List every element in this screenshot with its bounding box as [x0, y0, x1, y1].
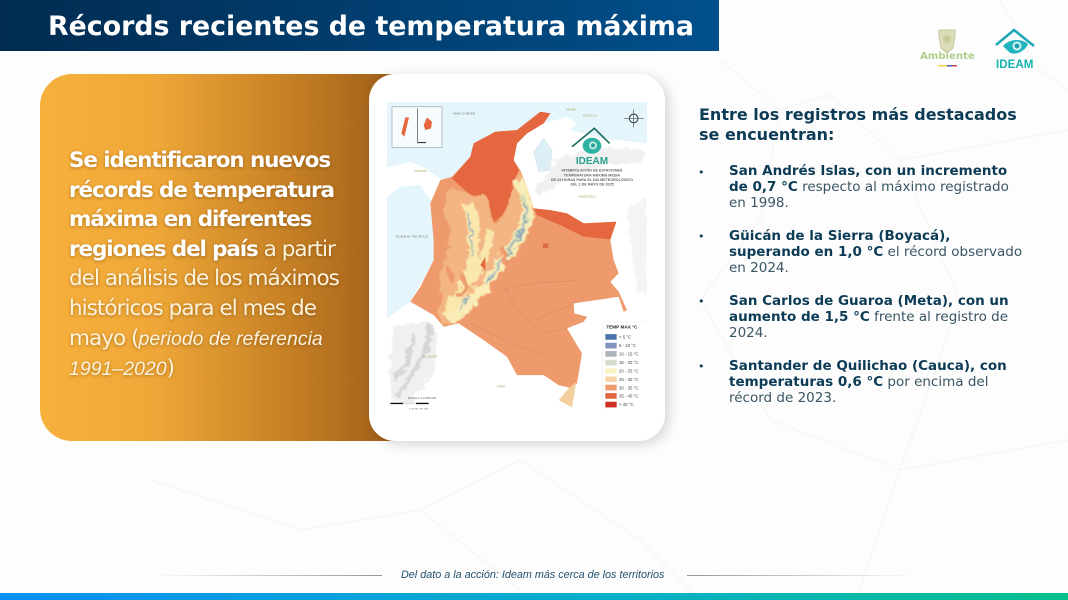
- logo: Ambiente: Ambiente: [920, 51, 975, 62]
- bullet: Güicán: Güicán de la Sierra (Boyacá),: [729, 228, 950, 244]
- map: temperature map of Colombia: [387, 102, 647, 410]
- intro text: del análisis de los máximos: [69, 266, 339, 291]
- bullet: San Andrés: [729, 163, 1009, 211]
- bullet: San Andrés: en 1998.: [729, 195, 789, 211]
- map: temperature map of Colombia: INTERPOLACIÓN DE ESTACIONES: [562, 168, 623, 173]
- bullet: Santander: Santander de Quilichao (Cauca), con: [729, 358, 1007, 374]
- bullet: San Carlos: San Carlos de Guaroa (Meta), con un: [729, 293, 1009, 309]
- bullet: San Andrés: San Andrés Islas, con un incremento: [729, 163, 1007, 179]
- map: temperature map of Colombia: ARUBA: [566, 108, 577, 112]
- bottom gradient bar: [0, 593, 1068, 600]
- intro text: 1991–2020): [69, 356, 174, 381]
- legend: 25 - 30 °C: [619, 377, 639, 382]
- intro text: históricos para el mes de: [69, 296, 316, 321]
- bullet mark 1: •: [698, 166, 704, 179]
- legend: TEMP MAX °C: [606, 325, 638, 330]
- legend: > 40 °C: [619, 402, 634, 407]
- map: temperature map of Colombia: DE 24 HORAS PARA EL DÍA METEOROLÓGICO: [551, 177, 633, 182]
- intro text: mayo (periodo de referencia: [69, 326, 323, 351]
- bullet: San Andrés: de 0,7 °C respecto al máximo registrado: [729, 179, 1009, 195]
- bullet mark 3: •: [698, 295, 704, 308]
- bullet: Güicán: en 2024.: [729, 260, 789, 276]
- map: temperature map of Colombia: ANTILLAS: [583, 114, 597, 118]
- logo: IDEAM: IDEAM: [996, 58, 1033, 71]
- bullet: Santander: récord de 2023.: [729, 390, 836, 406]
- map: temperature map of Colombia: TEMPERATURA MÁXIMA MEDIA: [564, 172, 620, 177]
- heading: destacados: Entre los registros más destacados: [699, 105, 1017, 124]
- map: temperature map of Colombia: PERÚ: [497, 383, 505, 388]
- map: temperature map of Colombia: DEL 1 DE MAYO DE 2025: [570, 183, 614, 187]
- bullet: San Carlos: aumento de 1,5 °C frente al registro de: [729, 309, 1008, 325]
- title: Récords recientes de temperatura máxima: [48, 11, 694, 42]
- map: temperature map of Colombia: OCÉANO PACÍFICO: [396, 233, 429, 238]
- intro text: récords de temperatura: [69, 178, 334, 203]
- legend: 15 - 20 °C: [619, 360, 639, 365]
- legend: < 5 °C: [619, 335, 631, 340]
- panel: orange intro: [40, 74, 410, 441]
- heading: destacados: se encuentran:: [699, 125, 834, 144]
- intro text: regiones del país a partir: [69, 237, 335, 262]
- logo: Ambiente: [920, 30, 975, 66]
- legend: 20 - 25 °C: [619, 369, 639, 374]
- bullet: Güicán: superando en 1,0 °C el récord observado: [729, 244, 1022, 260]
- map: temperature map of Colombia: MAR CARIBE: [453, 112, 475, 116]
- map: temperature map of Colombia: VENEZUELA: [578, 194, 596, 198]
- bullet: Santander: temperaturas 0,6 °C por encima del: [729, 374, 988, 390]
- bullet: San Carlos: [729, 293, 1009, 341]
- legend: 5 - 10 °C: [619, 343, 636, 348]
- bullet: Santander: [729, 358, 1007, 406]
- map: temperature map of Colombia: IDEAM: [576, 156, 608, 167]
- intro text: [68, 148, 340, 381]
- legend: [605, 325, 639, 407]
- bullet mark 4: •: [698, 360, 704, 373]
- legend: 30 - 35 °C: [619, 385, 639, 390]
- map: temperature map of Colombia: PANAMÁ: [414, 169, 427, 173]
- intro text: Se identificaron nuevos: [69, 148, 330, 173]
- heading: destacados: [699, 105, 1017, 144]
- logo: IDEAM: [995, 28, 1035, 71]
- legend: 10 - 15 °C: [619, 352, 639, 357]
- panel: map card: [369, 74, 665, 441]
- Colombia regions: [410, 112, 627, 407]
- bullet mark 2: •: [698, 230, 704, 243]
- bullet: San Carlos: 2024.: [729, 325, 768, 341]
- map: temperature map of Colombia: ESCALA 1:3.800.000: [408, 396, 437, 400]
- legend: 35 - 40 °C: [619, 394, 639, 399]
- bullet: Güicán: [729, 228, 1022, 276]
- footer slogan: Del dato a la acción: Ideam más cerca de los territorios: [401, 569, 664, 581]
- map: temperature map of Colombia: ECUADOR: [422, 355, 438, 359]
- header banner: [0, 0, 719, 51]
- intro text: máxima en diferentes: [69, 207, 311, 232]
